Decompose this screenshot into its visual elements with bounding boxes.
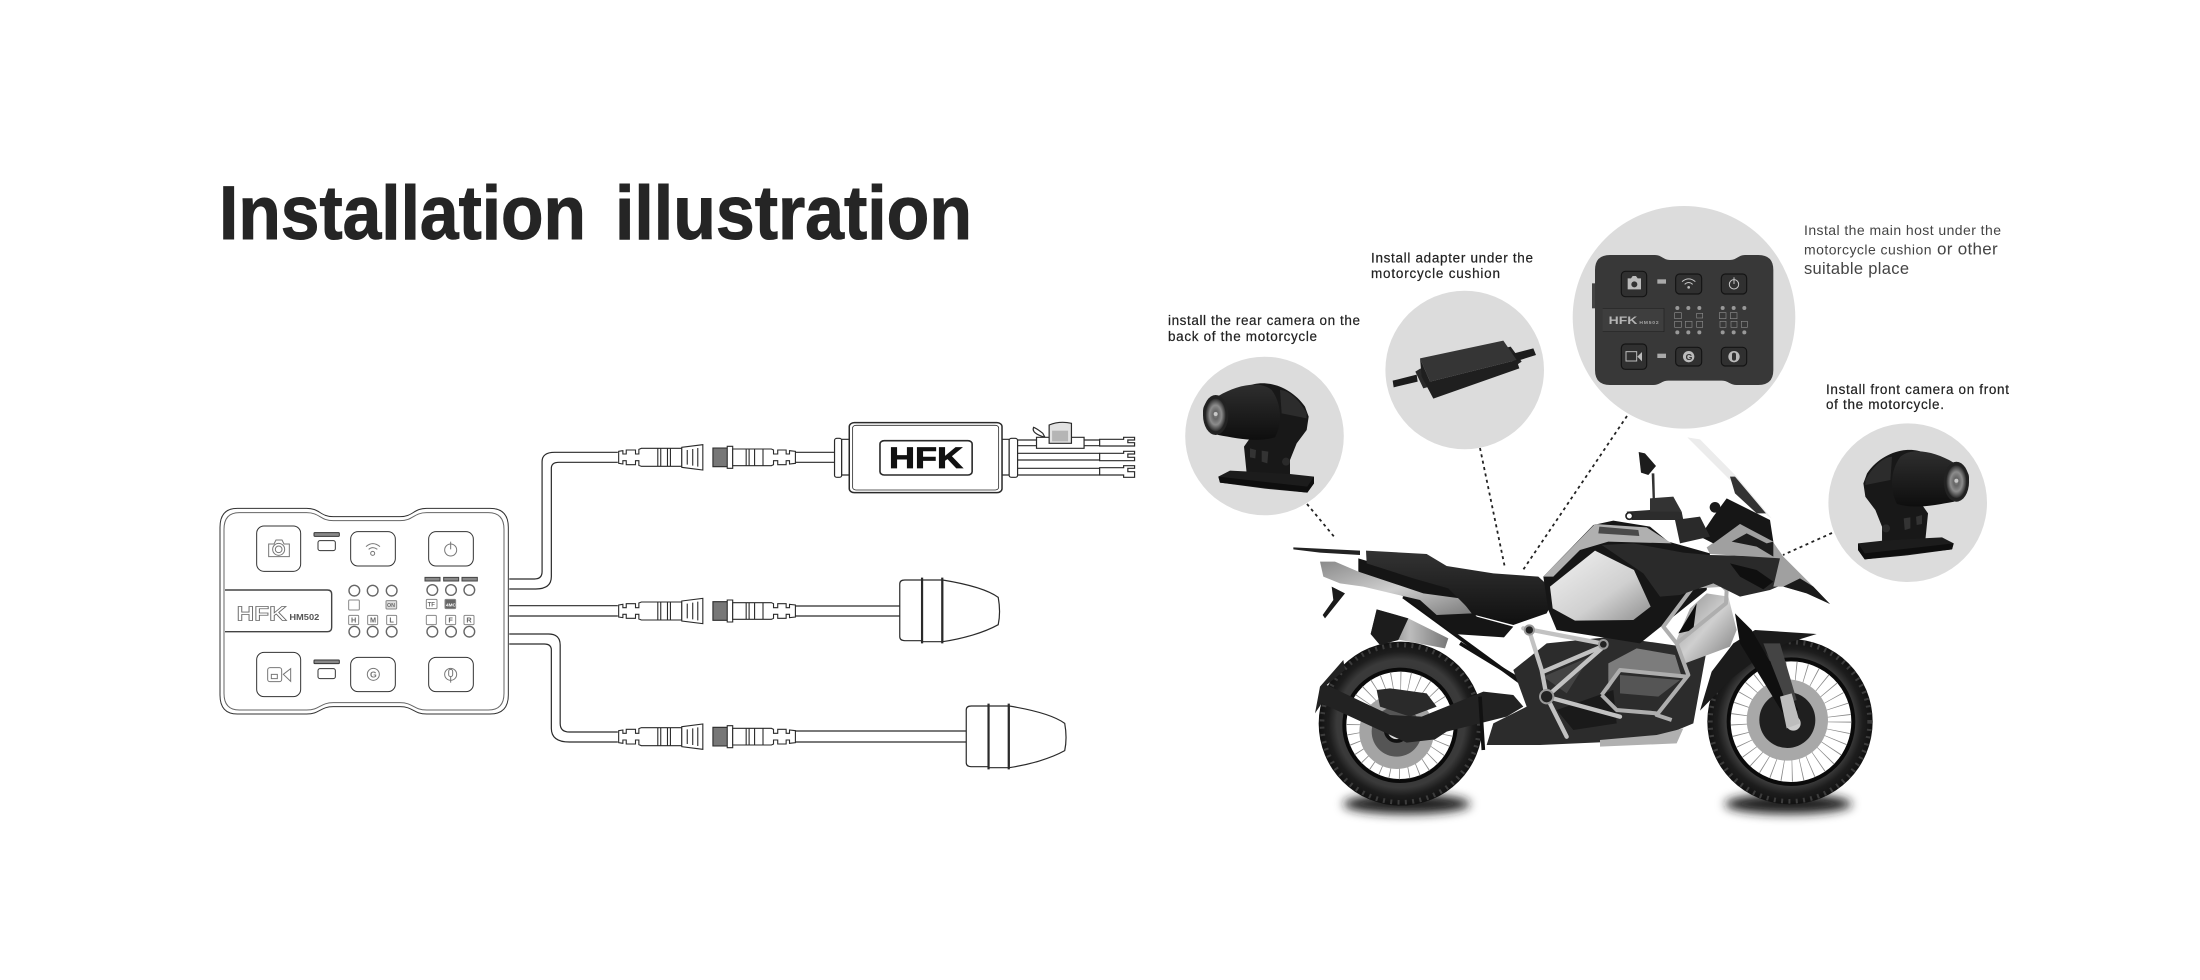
- rear camera line drawing: [900, 578, 999, 643]
- icons on buttons: [268, 540, 457, 683]
- windshield: [1687, 437, 1772, 518]
- main host line drawing: L: [389, 616, 394, 625]
- front wheel: [1707, 639, 1873, 804]
- wiring diagram: [220, 422, 1135, 769]
- title: Installation: [219, 171, 586, 256]
- seat: [1366, 551, 1557, 625]
- under seat panel: [1358, 558, 1513, 637]
- indicator lights: [349, 585, 475, 637]
- cylinder: [1608, 648, 1682, 690]
- dotted leader lines: [1307, 416, 1832, 570]
- fuel tank: [1543, 521, 1710, 643]
- front fork: [1735, 613, 1800, 728]
- main host line drawing: R: [466, 616, 472, 625]
- wheel shadows: [1343, 794, 1852, 814]
- adapter box: HFK: [889, 442, 963, 475]
- main host line drawing: HFK: [237, 603, 287, 626]
- muffler: [1371, 609, 1448, 648]
- front camera line drawing: [966, 704, 1066, 769]
- host product photo: [1592, 255, 1773, 385]
- callout: main host: [1573, 206, 2001, 429]
- callout: main host: Instal the main host under the: [1804, 222, 2001, 238]
- callout: front camera: [1826, 382, 2009, 582]
- rear wheel: [1319, 642, 1483, 806]
- host product photo: HFK: [1609, 315, 1638, 327]
- callout: rear camera: [1168, 313, 1360, 515]
- engine: [1487, 637, 1707, 745]
- skid plate: [1600, 728, 1683, 747]
- callout: main host: suitable place: [1804, 260, 1909, 278]
- callout: front camera: of the motorcycle.: [1826, 397, 1944, 412]
- callout: rear camera: back of the motorcycle: [1168, 329, 1317, 344]
- main host line drawing: HM502: [289, 613, 320, 622]
- adapter box: [835, 422, 1135, 493]
- callout: adapter: [1371, 250, 1544, 449]
- front section: [1600, 437, 1873, 804]
- main host line drawing: 4MC: [446, 602, 456, 607]
- frame joints: [1525, 625, 1608, 703]
- main host line drawing: [220, 508, 508, 714]
- motorcycle: [1293, 437, 1873, 814]
- callout: front camera: Install front camera on front: [1826, 382, 2009, 397]
- front fender: [1700, 630, 1817, 711]
- swingarm: [1315, 660, 1523, 743]
- side panel: [1602, 543, 1793, 597]
- icons on buttons: G: [370, 670, 377, 680]
- callout: main host: motorcycle cushion or other: [1804, 240, 1998, 258]
- host product photo: G: [1686, 352, 1693, 362]
- rear frame tubes: [1403, 597, 1540, 750]
- connector pairs: [619, 445, 795, 749]
- main host line drawing: ON: [387, 603, 395, 609]
- rack and tail: [1293, 547, 1472, 618]
- callout: adapter: Install adapter under the: [1371, 250, 1533, 266]
- host product photo: HM502: [1639, 320, 1659, 326]
- callout: adapter: motorcycle cushion: [1371, 266, 1500, 281]
- main host line drawing: H: [351, 616, 356, 625]
- main frame: [1523, 628, 1620, 737]
- handlebar and controls: [1626, 497, 1773, 543]
- cables: [509, 452, 966, 742]
- mirror: [1639, 452, 1656, 500]
- radiator guard: [1675, 593, 1737, 663]
- crash bars: [1602, 563, 1727, 720]
- main host line drawing: F: [448, 616, 453, 625]
- main host line drawing: M: [370, 616, 376, 625]
- beak: [1707, 524, 1830, 604]
- callout: rear camera: install the rear camera on the: [1168, 313, 1360, 328]
- main host line drawing: TF: [428, 602, 435, 608]
- title: illustration: [615, 171, 972, 256]
- title: [219, 171, 972, 256]
